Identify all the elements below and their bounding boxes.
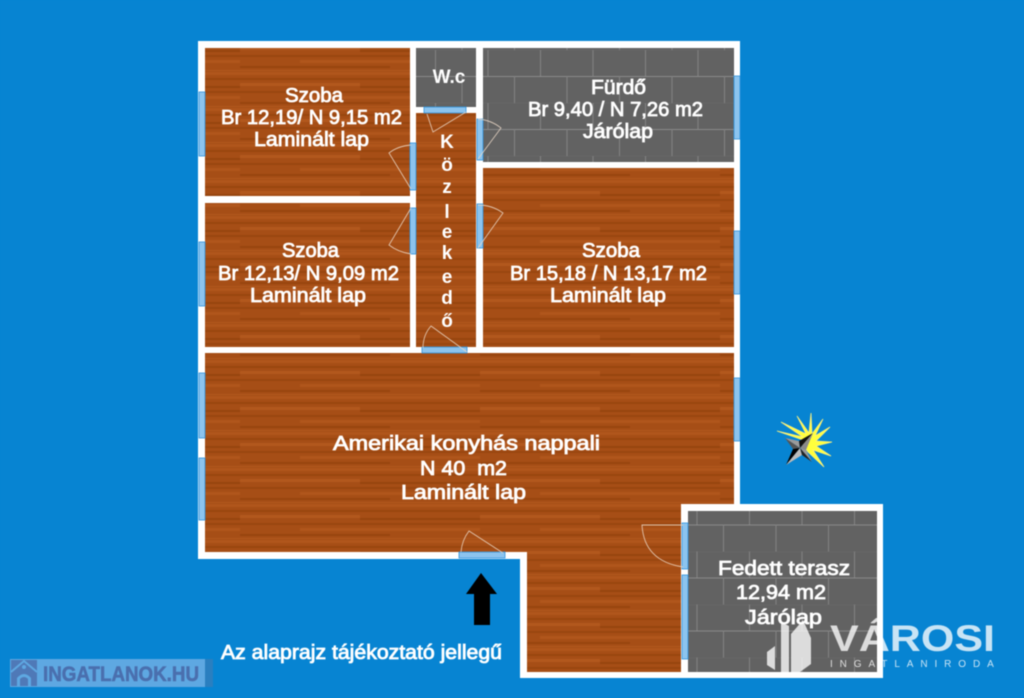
label: Fürdő: Fürdő [591,77,646,99]
label: Közlekedő vertical: d [441,288,453,309]
label: Amerikai konyhás nappali: Laminált lap [401,482,526,504]
room: Fedett terasz floor [688,511,877,672]
label: Közlekedő vertical: e [442,267,452,288]
logo: ingatlanok.hu [10,659,213,687]
label: Közlekedő vertical: ö [441,155,453,176]
icon: building [767,620,811,672]
label: Közlekedő vertical: k [442,243,453,264]
room: W.c floor [416,48,476,107]
label: Szoba top left [221,85,402,151]
label: Fürdő: Járólap [583,121,653,143]
label: Szoba right: Szoba [582,240,641,262]
label: Szoba top left: Szoba [285,85,344,107]
compass needles [785,438,800,448]
label: Közlekedő vertical: K [440,132,454,153]
label: Fürdő: Br 9,40 / N 7,26 m2 [528,99,703,121]
room: Szoba right floor [483,168,734,347]
icon: entrance arrow [466,573,497,625]
logo subtitle: INGATLANIRODA [830,659,1001,670]
windows and door openings [199,76,740,659]
label: Szoba middle left: Laminált lap [250,285,366,307]
label: Közlekedő vertical: z [442,177,452,198]
label: Amerikai konyhás nappali: Amerikai konyhás nappali [333,433,600,455]
label: Szoba top left: Br 12,19/ N 9,15 m2 [221,107,402,129]
door swings [389,112,683,567]
room: Amerikai konyhás nappali floor [205,353,734,672]
label: Fürdő [528,77,703,143]
yellow rays [777,413,832,467]
label: Fedett terasz: Járólap [745,607,822,629]
label: Szoba middle left: Szoba [282,240,340,262]
disclaimer text: Az alaprajz tájékoztató jellegű [221,642,502,664]
icon: compass star [777,413,832,467]
label: Közlekedő vertical: e [442,222,452,243]
label: Szoba top left: Laminált lap [254,129,369,151]
logo: Városi ingatlaniroda [767,618,1001,672]
label: Szoba right: Laminált lap [550,285,666,307]
room: Közlekedő floor [416,113,476,347]
icon: house [11,660,37,686]
logo text: INGATLANOK.HU [43,663,199,686]
label: Fedett terasz [718,558,850,629]
label: Közlekedő vertical: l [444,202,450,223]
room: Fürdő floor [483,48,734,162]
label: Fedett terasz: 12,94 m2 [736,582,826,604]
label: Közlekedő vertical: ő [441,311,453,332]
label: Szoba middle left: Br 12,13/ N 9,09 m2 [218,263,399,285]
label: Szoba right [510,240,707,307]
label: Szoba right: Br 15,18 / N 13,17 m2 [510,263,707,285]
room: Szoba middle left floor [205,203,410,347]
label: W.c: W.c [433,67,466,88]
label: Amerikai konyhás nappali: N 40 m2 [420,458,507,480]
logo wordmark: VÁROSI [830,618,995,659]
floor plan walls [198,41,883,678]
room: Szoba top left floor [205,48,410,196]
label: Amerikai konyhás nappali [333,433,600,504]
label: Szoba middle left [218,240,399,307]
label: Fedett terasz: Fedett terasz [718,558,850,580]
